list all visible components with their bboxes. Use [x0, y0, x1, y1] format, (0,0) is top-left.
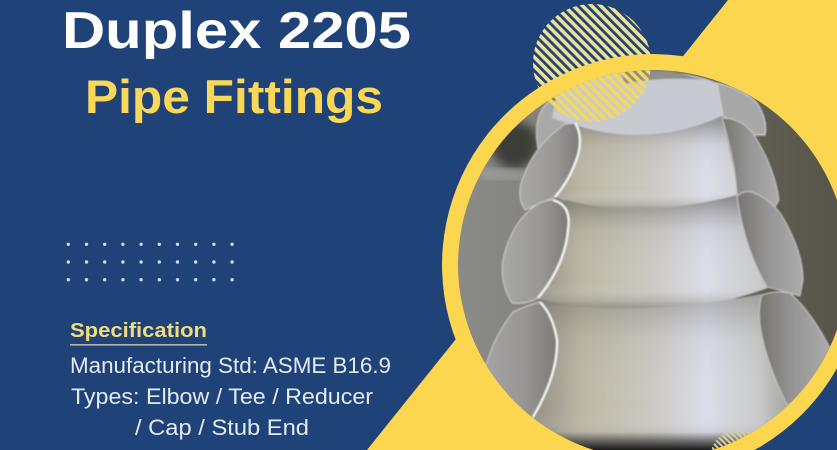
spec line: manufacturing standard: Manufacturing Std: ASME B16.9: [70, 353, 391, 378]
elbow body 1: [552, 71, 724, 138]
heading underline: [70, 344, 207, 346]
striped circle: top: [533, 4, 651, 122]
small striped circle: bottom: [712, 430, 750, 450]
elbow body 4: [533, 294, 790, 450]
subtitle: Pipe Fittings: Pipe Fittings: [85, 70, 383, 123]
right elbow openings: [717, 83, 832, 405]
specification block: [70, 320, 391, 440]
yellow ring around photo: [442, 54, 837, 450]
specification heading: Specification: [70, 320, 207, 342]
photo: stacked steel elbows: [458, 70, 837, 450]
title: Duplex 2205: Duplex 2205: [62, 2, 411, 60]
yellow corner: top right: [640, 0, 837, 330]
elbow body 3: [538, 195, 768, 312]
yellow corner: bottom left: [367, 339, 640, 450]
striped circle overlapping photo: [548, 70, 650, 122]
spec line: types continued: / Cap / Stub End: [135, 415, 309, 440]
spec line: types: Types: Elbow / Tee / Reducer: [71, 384, 373, 409]
back elbow opening: left: [535, 100, 566, 150]
decorative dot grid: [67, 243, 234, 281]
left elbow openings: [485, 122, 582, 419]
elbow body 2: [556, 116, 740, 214]
